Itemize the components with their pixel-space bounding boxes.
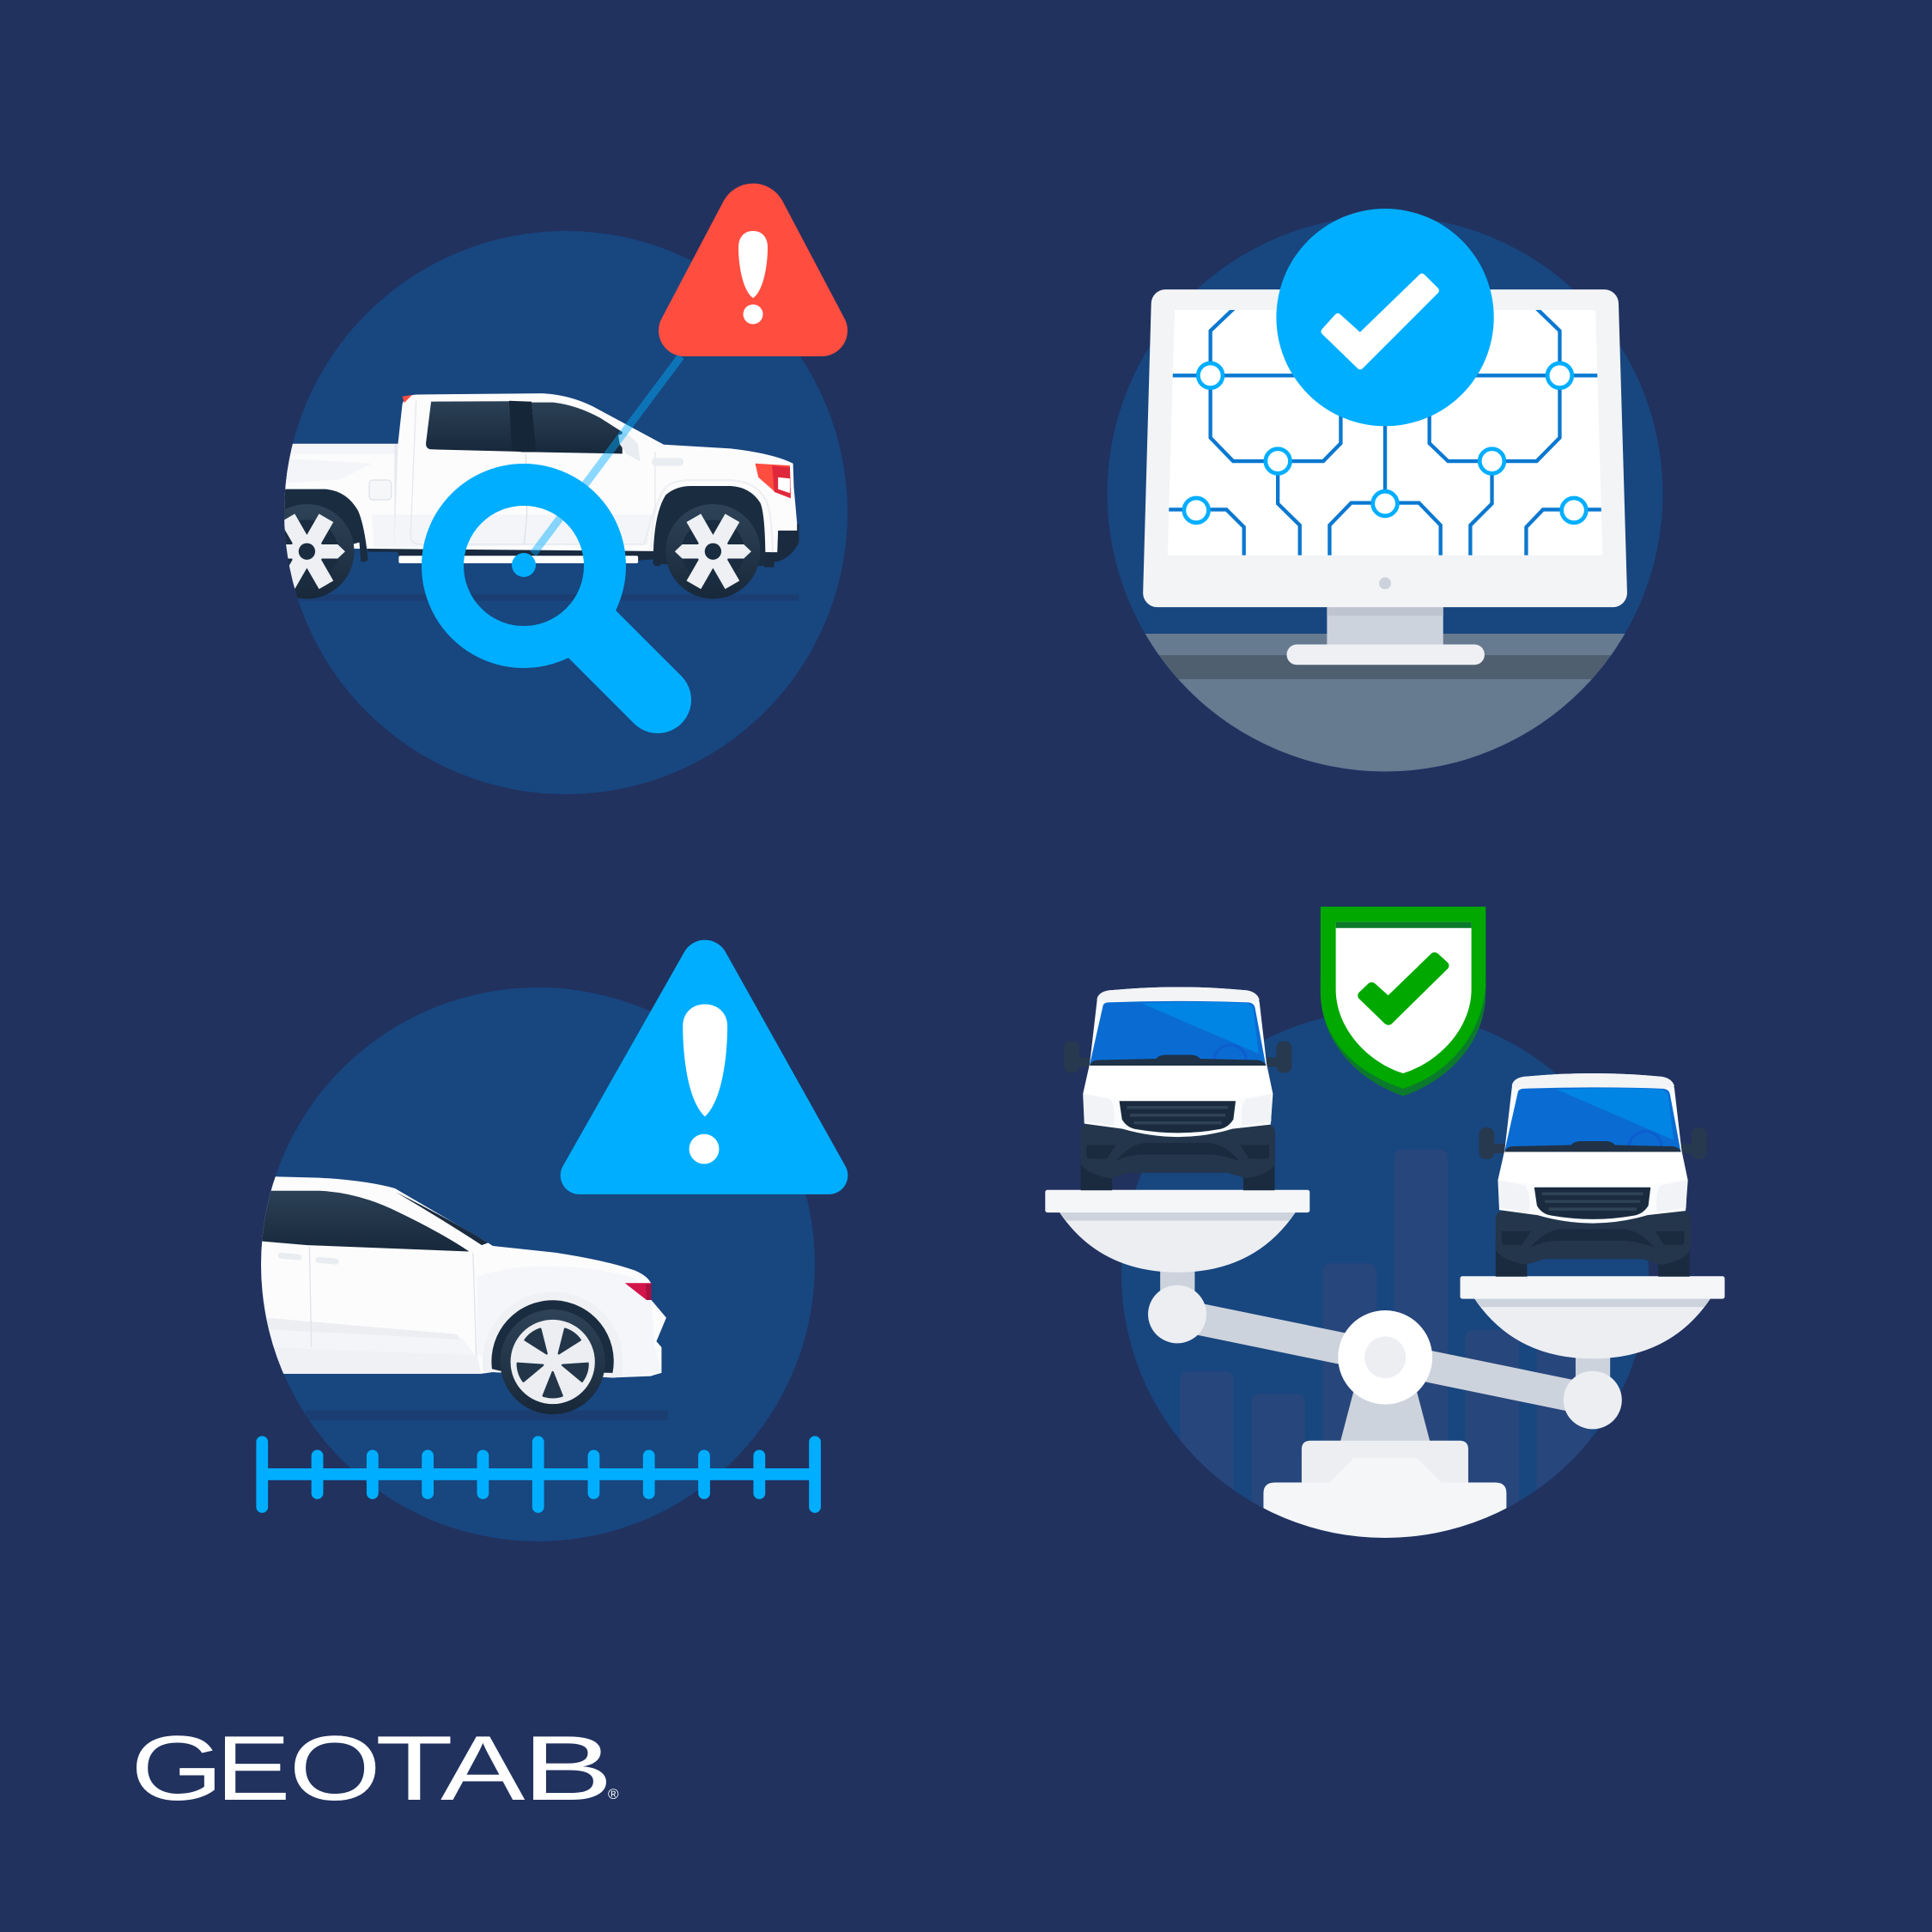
pickup truck [259, 393, 799, 601]
right van [1479, 1073, 1707, 1277]
red alert link line [533, 356, 681, 554]
logo letter T: T [375, 1717, 453, 1820]
magnifying glass icon [443, 484, 691, 733]
registered mark: ® [608, 1786, 619, 1802]
distance ruler [256, 1436, 821, 1513]
panel: pickup truck inspection [259, 184, 848, 794]
icon: red warning triangle [659, 184, 848, 356]
panel: balance scale with vans [1045, 907, 1725, 1607]
panel: car and distance ruler [256, 940, 848, 1541]
background bar chart [1180, 1149, 1590, 1508]
logo letter G: G [131, 1717, 223, 1820]
panel backdrop circle [261, 987, 815, 1541]
desktop monitor [1143, 209, 1627, 665]
panel: monitor with circuit [1091, 209, 1674, 780]
car wheel [501, 1309, 605, 1414]
icon: check badge [1276, 209, 1494, 426]
circuit nodes [1184, 363, 1586, 523]
panel backdrop circle [284, 231, 848, 794]
logo letter B: B [522, 1716, 613, 1820]
circuit diagram [1167, 308, 1604, 557]
icon: green shield [1321, 907, 1485, 1096]
white car [256, 1176, 668, 1420]
left van [1064, 987, 1291, 1190]
floor bands [1145, 634, 1625, 771]
icon: blue warning triangle [561, 940, 848, 1194]
right pan [1461, 1276, 1725, 1358]
scale beam and pans [1045, 907, 1725, 1429]
panel backdrop circle [1121, 1011, 1649, 1538]
logo letter A: A [440, 1717, 526, 1820]
left pan [1045, 1190, 1309, 1273]
balance scale [1045, 907, 1725, 1559]
panel backdrop circle [1108, 216, 1662, 771]
scale base [1263, 1392, 1506, 1538]
logo letter E: E [216, 1717, 290, 1820]
Geotab logo [131, 1716, 619, 1820]
logo letter O: O [289, 1717, 381, 1820]
